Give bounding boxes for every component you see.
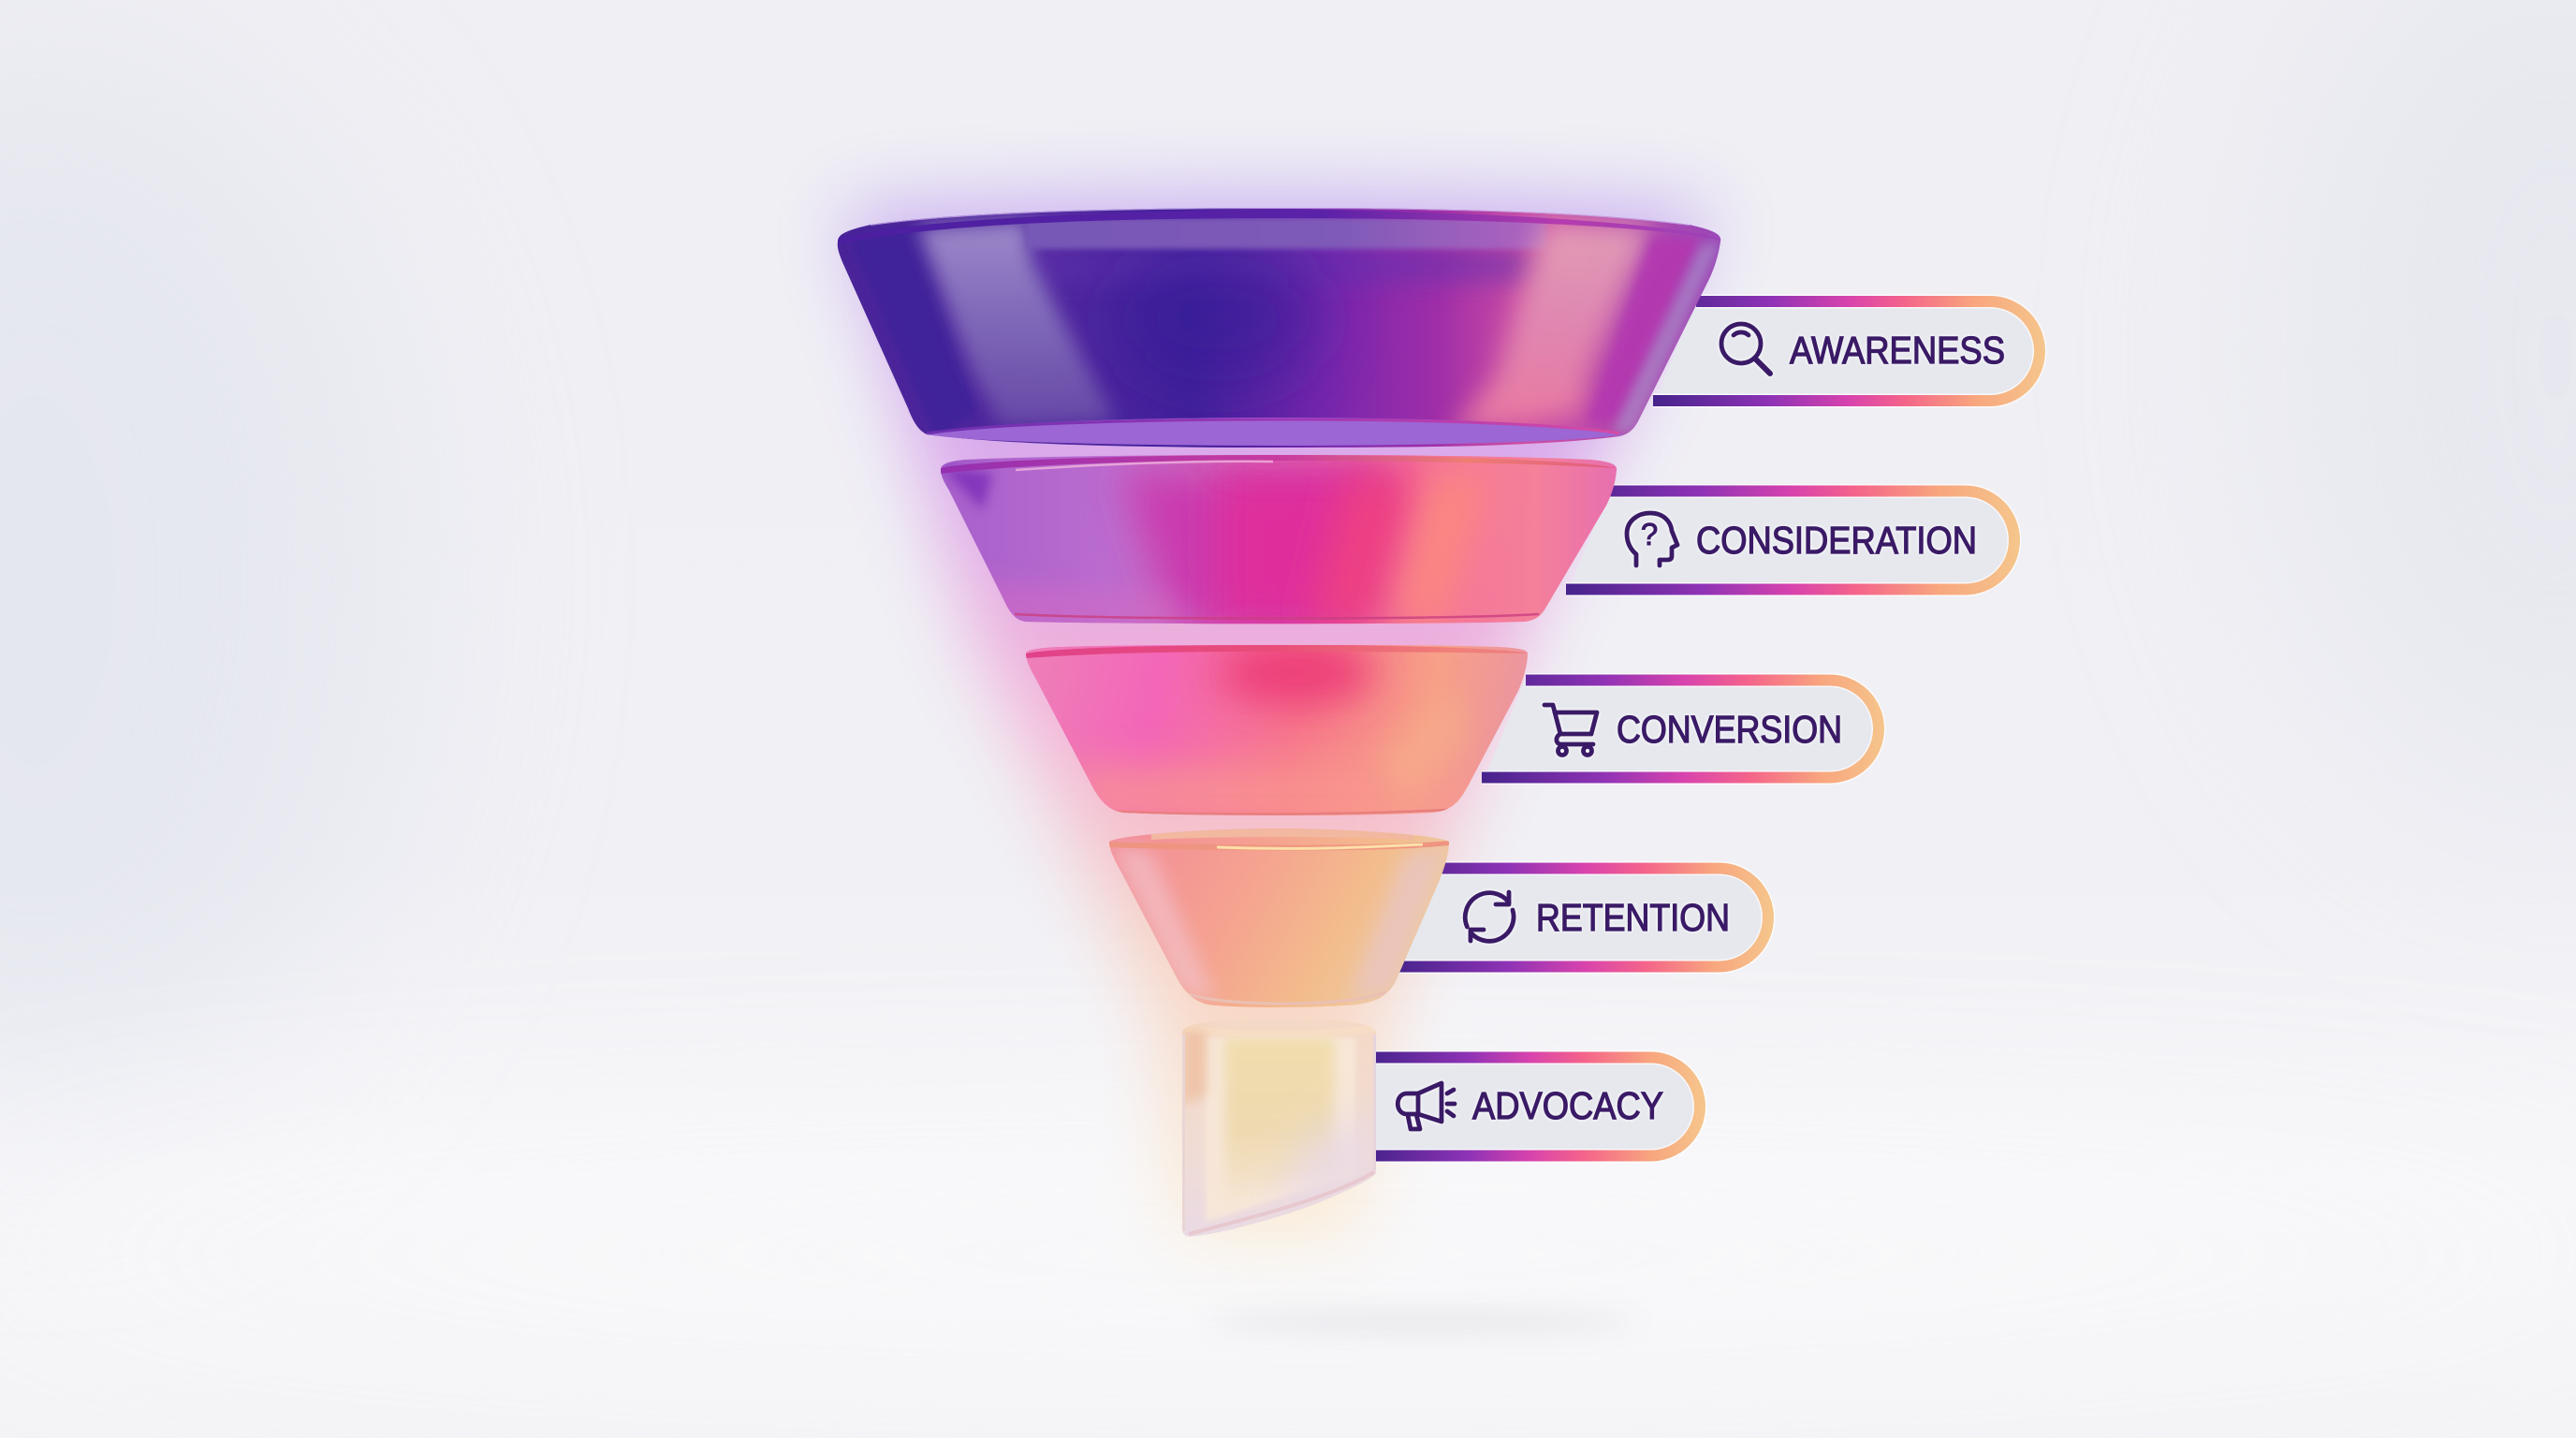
funnel colour glow bbox=[842, 197, 1713, 1236]
label: advocacy bbox=[1368, 1055, 1704, 1158]
funnel tier 1: awareness bbox=[824, 201, 1741, 454]
panel: funnel bbox=[824, 201, 1741, 1240]
label: consideration bbox=[1566, 489, 2018, 592]
label: retention bbox=[1396, 866, 1772, 969]
label: conversion bbox=[1482, 678, 1883, 781]
icon: head with question mark: ? bbox=[1641, 517, 1658, 551]
icon: refresh arrows bbox=[1465, 892, 1514, 941]
icon: shopping cart bbox=[1544, 705, 1597, 755]
icon: megaphone bbox=[1398, 1083, 1455, 1129]
icon: head with question mark bbox=[1627, 513, 1677, 565]
label text: conversion: CONVERSION bbox=[1617, 708, 1842, 751]
label text: advocacy: ADVOCACY bbox=[1472, 1084, 1663, 1127]
funnel tier 3: conversion bbox=[1026, 645, 1528, 815]
label text: consideration: CONSIDERATION bbox=[1696, 519, 1977, 562]
funnel tier 4: retention bbox=[1105, 824, 1456, 1011]
label text: awareness: AWARENESS bbox=[1790, 329, 2005, 372]
funnel tier 2: consideration bbox=[936, 449, 1629, 627]
funnel tier 5: advocacy bbox=[1179, 1016, 1381, 1240]
floor shadow bbox=[1208, 1313, 1638, 1330]
label: awareness bbox=[1653, 300, 2043, 403]
label text: retention: RETENTION bbox=[1536, 896, 1730, 939]
icon: magnifier bbox=[1721, 324, 1770, 374]
